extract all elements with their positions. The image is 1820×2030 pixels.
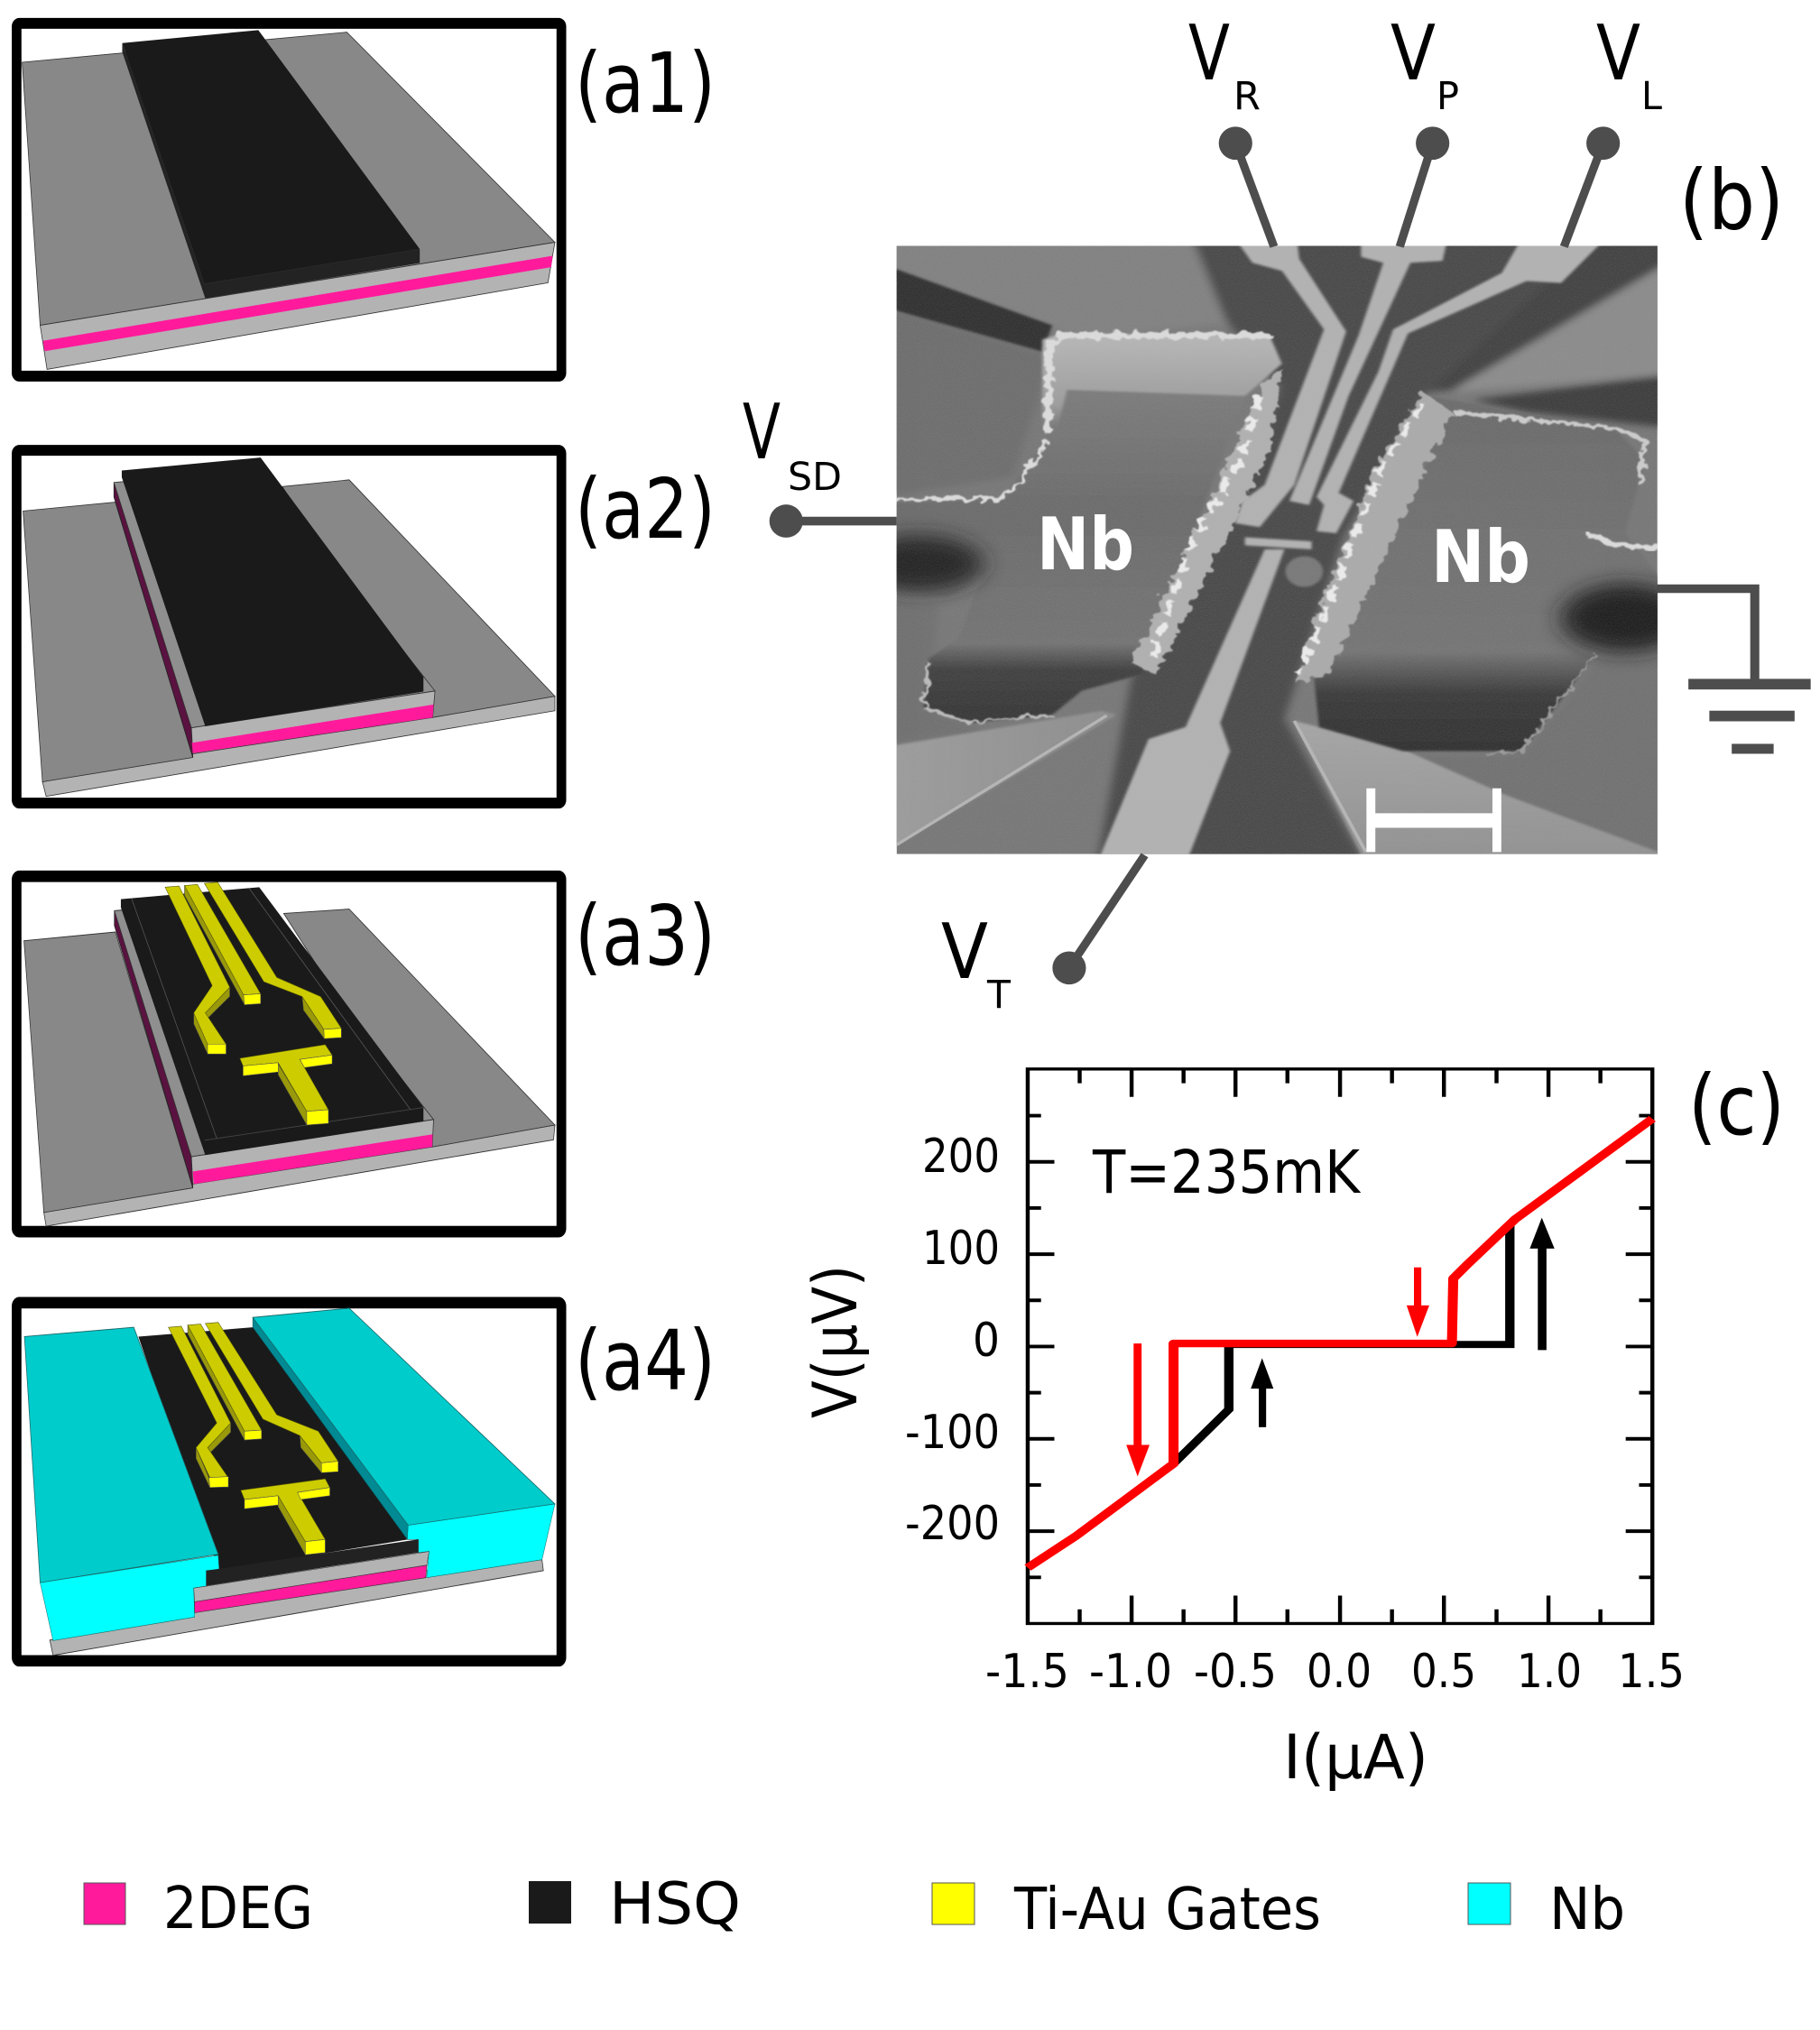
wiring and ground symbol — [770, 126, 1811, 984]
curve: sweep down (red) — [1028, 1119, 1652, 1568]
label: V_P — [1390, 9, 1459, 119]
x tick labels: 0.0 — [1307, 1645, 1372, 1699]
panel: a1 device schematic — [16, 23, 561, 376]
a3 HSQ — [121, 887, 423, 1155]
chart axes and ticks — [1028, 1069, 1652, 1623]
wire VL — [1564, 126, 1620, 246]
edge highlight lines — [897, 715, 1366, 852]
a4 left Nb top — [24, 1327, 218, 1582]
panel: b SEM micrograph — [897, 245, 1658, 854]
gate electrodes — [1096, 238, 1605, 864]
label: V_L — [1596, 9, 1662, 119]
arrow: red long down — [1126, 1343, 1150, 1476]
label: V_SD: SD — [788, 455, 842, 500]
a2 mesa side — [114, 483, 193, 758]
label: V_SD: V — [743, 388, 781, 477]
x tick labels: -1.5 — [985, 1645, 1069, 1699]
a4 HSQ front — [207, 1539, 419, 1586]
label: V_R: R — [1233, 74, 1261, 119]
a1 HSQ top — [122, 30, 420, 284]
a1 HSQ front — [122, 43, 420, 299]
grain overlay — [897, 246, 1658, 854]
panel: a4 device schematic — [16, 1303, 561, 1661]
a4 gate R — [169, 1326, 231, 1488]
label: a1: (a1) — [575, 35, 716, 132]
legend: Ti-Au Gates: Ti-Au Gates — [1013, 1877, 1321, 1943]
dark shadow stripe — [884, 265, 1052, 352]
a2 right gray region — [282, 480, 555, 717]
legend: 2DEG: 2DEG — [163, 1876, 313, 1942]
label: Nb left: Nb — [1037, 503, 1134, 586]
curve: sweep up (black) — [1174, 1225, 1510, 1463]
legend: Nb — [1468, 1877, 1625, 1943]
legend — [84, 1871, 1625, 1943]
y tick labels: -200 — [905, 1497, 1000, 1551]
y tick labels: 200 — [922, 1130, 1000, 1184]
a4 gate T — [241, 1479, 330, 1555]
temperature annotation: T=235mK — [1092, 1138, 1362, 1207]
a2 HSQ — [122, 457, 423, 726]
a2 left gray region — [23, 503, 193, 782]
bottom-left light wedge — [897, 711, 1115, 845]
a4 mesa front — [194, 1552, 429, 1601]
a2 mesa front — [191, 691, 435, 753]
a4 gate L — [205, 1323, 338, 1472]
a1 2DEG layer — [43, 255, 552, 351]
a2 mesa top — [114, 469, 435, 728]
label: V_L: V — [1596, 9, 1640, 98]
label: V_L: L — [1641, 74, 1662, 119]
x tick labels: 1.5 — [1618, 1645, 1685, 1699]
arrow: black long up — [1529, 1218, 1555, 1350]
a3 mesa top — [115, 898, 434, 1157]
a3 mesa front — [191, 1120, 434, 1184]
a3 gate L — [204, 882, 341, 1038]
SEM background — [884, 235, 1675, 864]
a3 mesa side — [115, 910, 193, 1188]
left Nb pad — [855, 334, 1282, 723]
arrow: red short down — [1407, 1268, 1429, 1337]
y tick labels — [905, 1130, 1000, 1551]
a2 2DEG layer — [192, 705, 434, 753]
a3 gate P — [184, 884, 261, 1005]
x tick labels: 1.0 — [1517, 1645, 1582, 1699]
a2 base front — [42, 697, 555, 797]
a4 2DEG layer — [195, 1565, 427, 1612]
y tick labels: 100 — [922, 1222, 1000, 1276]
label: V_R: V — [1188, 9, 1230, 98]
wire VSD — [770, 504, 897, 538]
y axis title: V(µV) — [800, 1265, 872, 1418]
a3 gate T — [240, 1045, 332, 1125]
label: V_T — [941, 908, 1012, 1018]
x tick labels: -1.0 — [1089, 1645, 1172, 1699]
y tick labels: 0 — [973, 1314, 1000, 1368]
wire VP — [1400, 126, 1449, 246]
legend: 2DEG — [84, 1876, 313, 1942]
x tick labels: 0.5 — [1411, 1645, 1476, 1699]
legend: Nb: Nb — [1549, 1877, 1625, 1943]
x axis title: I(µA) — [1283, 1722, 1428, 1794]
a3 frame — [16, 876, 561, 1232]
a4 right Nb top — [253, 1308, 555, 1526]
x tick labels — [985, 1645, 1685, 1699]
legend: HSQ — [529, 1871, 741, 1938]
a3 right gray region — [283, 909, 555, 1147]
a4 right Nb front — [407, 1504, 555, 1578]
label: b: (b) — [1679, 152, 1784, 249]
a4 base front — [50, 1560, 543, 1656]
a1 substrate top — [23, 32, 555, 326]
a2 frame — [16, 450, 561, 803]
y tick labels: -100 — [905, 1406, 1000, 1460]
panel: a3 device schematic — [16, 876, 561, 1232]
label: V_SD — [743, 388, 842, 500]
a3 2DEG layer — [193, 1134, 433, 1184]
legend: HSQ: HSQ — [609, 1871, 741, 1938]
label: V_P: V — [1390, 9, 1436, 98]
label: V_R — [1188, 9, 1261, 119]
scale bar — [1371, 789, 1497, 852]
ground symbol — [1657, 589, 1811, 753]
label: c: (c) — [1688, 1057, 1785, 1154]
a4 gate P — [188, 1324, 262, 1440]
label: V_P: P — [1437, 74, 1459, 119]
label: V_T: V — [941, 908, 988, 997]
label: a2: (a2) — [575, 461, 716, 558]
residue blob near top gate — [1286, 556, 1323, 586]
arrow: black short up — [1251, 1358, 1273, 1427]
label: V_T: T — [986, 973, 1012, 1018]
wire VT — [1052, 855, 1145, 984]
a3 base front — [44, 1125, 555, 1226]
x tick labels: -0.5 — [1194, 1645, 1277, 1699]
right Nb pad — [1294, 392, 1689, 755]
a3 gate R — [165, 886, 230, 1054]
a4 HSQ surface — [138, 1327, 408, 1571]
a4 left Nb front — [40, 1555, 219, 1640]
wire VR — [1219, 126, 1274, 246]
label: Nb right: Nb — [1431, 515, 1530, 599]
a1 substrate front — [40, 243, 555, 369]
a4 frame — [16, 1303, 561, 1661]
a1 frame — [16, 23, 561, 376]
panel: c I-V chart — [800, 1069, 1685, 1794]
label: a4: (a4) — [575, 1313, 716, 1409]
bottom-right light wedge — [1296, 720, 1658, 854]
label: a3: (a3) — [575, 888, 716, 984]
a3 left gray region — [24, 932, 193, 1213]
panel: a2 device schematic — [16, 450, 561, 803]
a4 right Nb side — [253, 1317, 408, 1539]
